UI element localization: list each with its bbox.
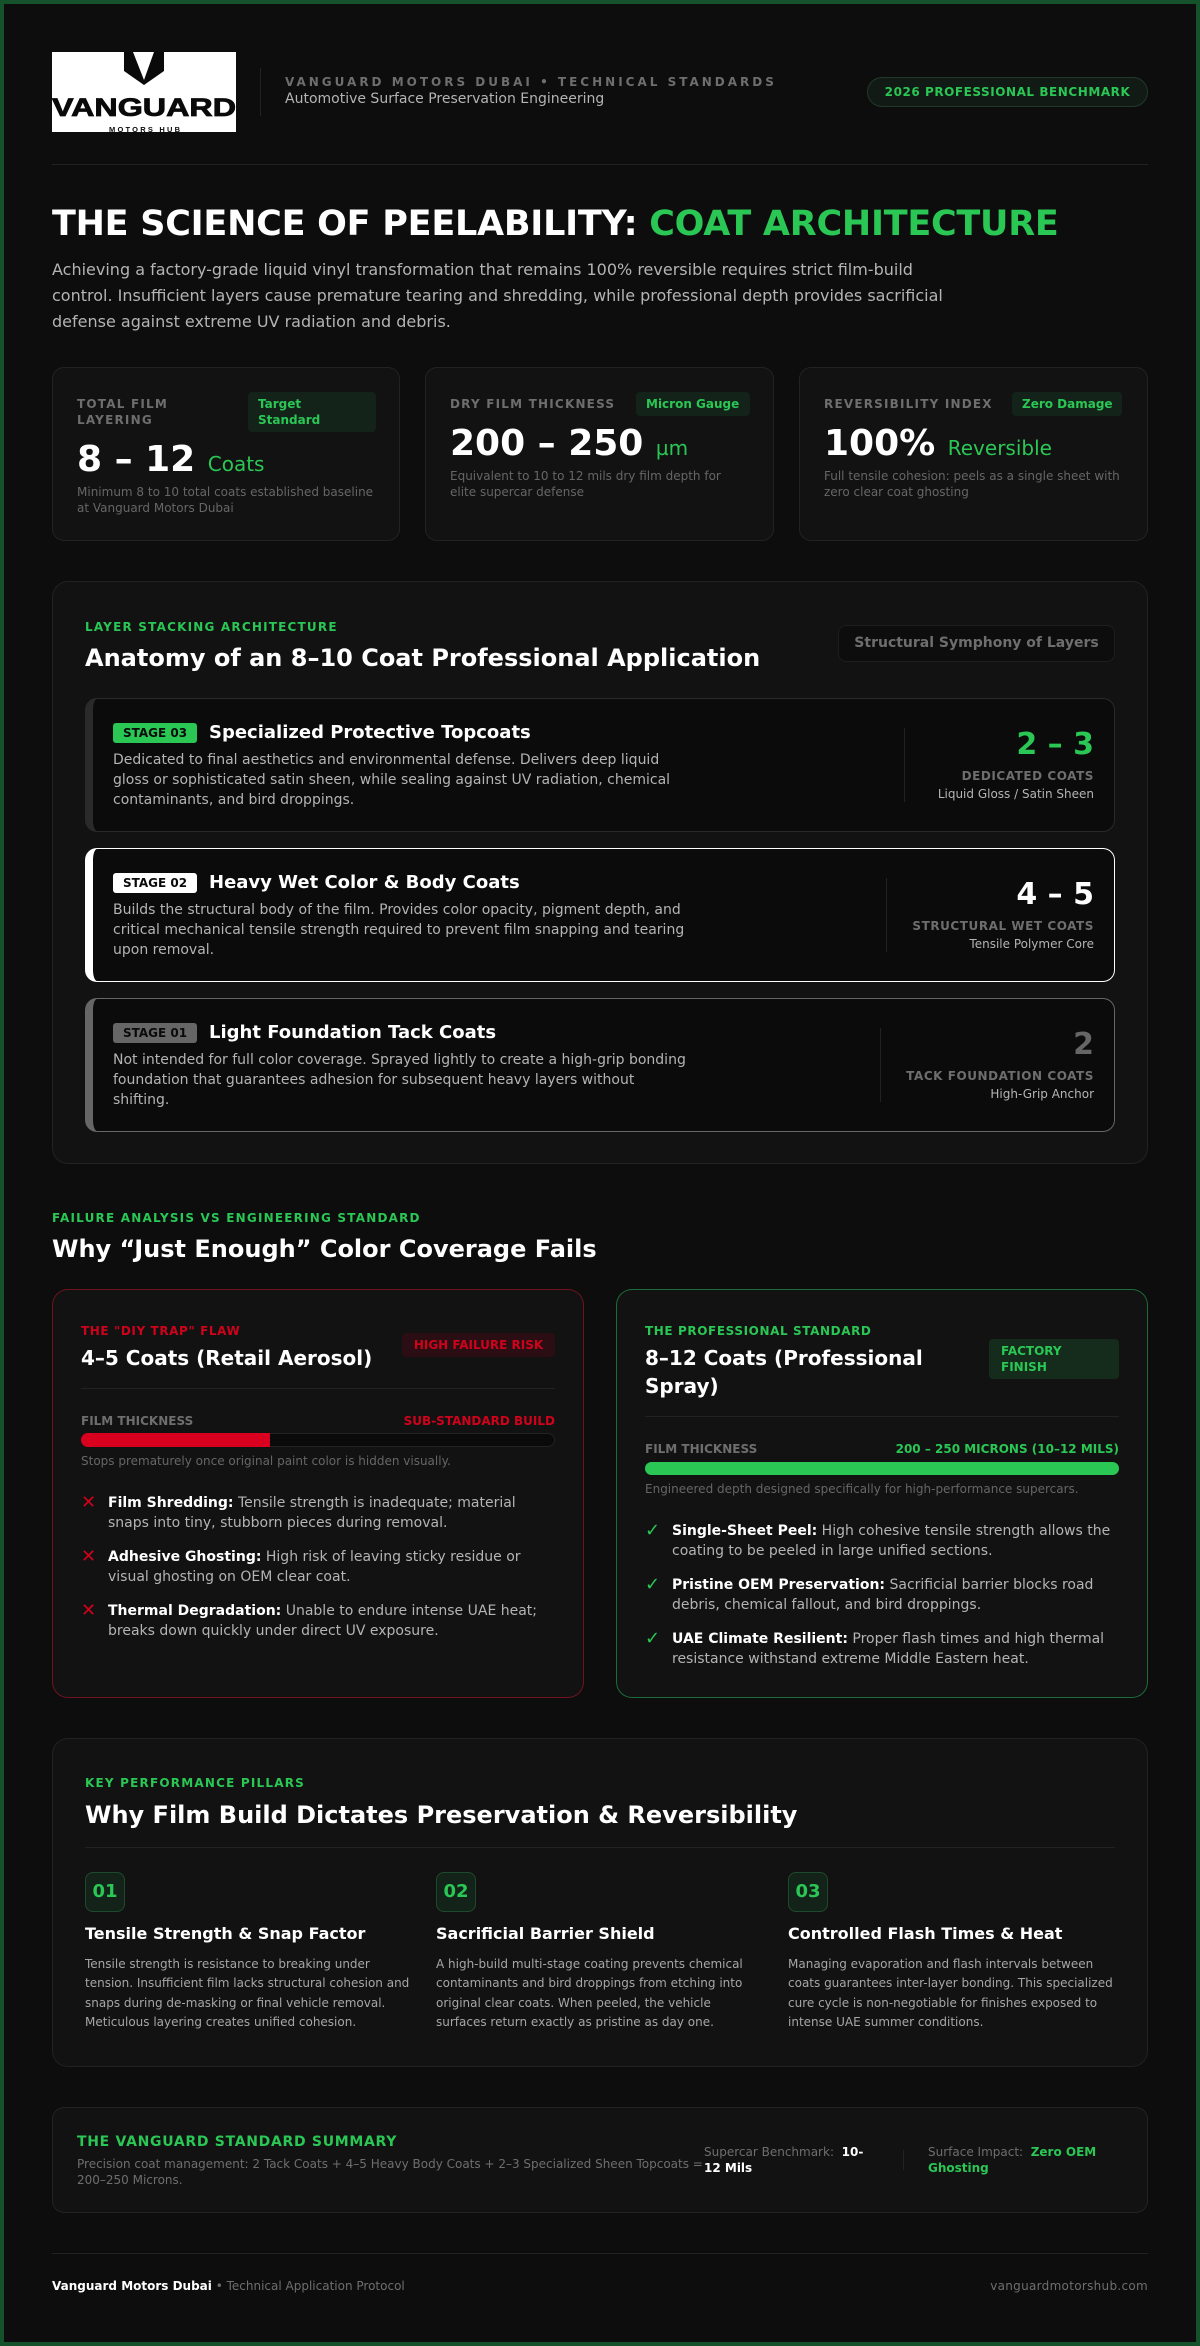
failure item xyxy=(81,1600,537,1639)
intro paragraph: Achieving a factory-grade liquid vinyl transformation that remains 100% reversible requires strict film-build xyxy=(52,260,913,279)
thickness bar xyxy=(81,1433,555,1447)
benefit item: coating to be peeled in large unified sections. xyxy=(672,1543,993,1559)
stage 01 card: TACK FOUNDATION COATS xyxy=(906,1069,1094,1083)
finish badge: FACTORY xyxy=(1001,1344,1062,1358)
panel: key performance pillars xyxy=(52,1738,1148,2067)
stage 03 card: gloss or sophisticated satin sheen, while sealing against UV radiation, chemical xyxy=(113,772,670,788)
stat card: reversibility index: 100% Reversible xyxy=(824,423,1052,464)
finish badge: FINISH xyxy=(1001,1360,1047,1374)
intro paragraph: control. Insufficient layers cause premature tearing and shredding, while professional depth provides sacrificial xyxy=(52,286,943,305)
panel: DIY trap: Stops prematurely once original paint color is hidden visually. xyxy=(81,1454,451,1468)
stage 02 card xyxy=(85,848,1115,982)
pillar 03: Managing evaporation and flash intervals between xyxy=(788,1957,1093,1971)
stage 02 card: STAGE 02 xyxy=(123,876,187,890)
benefit item xyxy=(645,1520,1110,1559)
benefit item: Pristine OEM Preservation: Sacrificial barrier blocks road xyxy=(672,1577,1093,1593)
panel: professional standard: 8–12 Coats (Professional xyxy=(645,1346,923,1370)
footer xyxy=(52,2279,1148,2293)
stat card: reversibility index: zero clear coat ghosting xyxy=(824,485,969,499)
failure item: Thermal Degradation: Unable to endure intense UAE heat; xyxy=(108,1603,537,1619)
stage 02 card: upon removal. xyxy=(113,942,214,958)
failure item: ✕ xyxy=(81,1600,96,1621)
pillar 01: 01 xyxy=(92,1881,118,1902)
panel: summary xyxy=(52,2107,1148,2213)
stage 02 card: 4 – 5 xyxy=(1016,877,1094,912)
panel: professional standard: Engineered depth designed specifically for high-performance supercars. xyxy=(645,1482,1079,1496)
stage 02 card: Tensile Polymer Core xyxy=(969,937,1094,951)
stat card: dry film thickness: 200 – 250 µm xyxy=(450,423,688,464)
pillar 02: original clear coats. When peeled, the vehicle xyxy=(436,1996,711,2010)
pillar 03 xyxy=(788,1872,1113,2029)
stat card: dry film thickness: Micron Gauge xyxy=(646,397,739,411)
header kicker: VANGUARD MOTORS DUBAI • TECHNICAL STANDARDS xyxy=(285,75,777,89)
benchmark badge xyxy=(867,77,1148,107)
summary text: 200–250 Microns. xyxy=(77,2173,183,2187)
heading: Anatomy of an 8–10 Coat Professional Application xyxy=(85,644,760,672)
header divider xyxy=(260,68,261,116)
title: THE SCIENCE OF PEELABILITY: COAT ARCHITECTURE xyxy=(52,204,1059,244)
logo: Vanguard Motors Hub: VANGUARD xyxy=(52,94,236,122)
stage 01 card: Not intended for full color coverage. Sprayed lightly to create a high-grip bonding xyxy=(113,1052,686,1068)
panel: professional standard: Spray) xyxy=(645,1374,719,1398)
summary heading: THE VANGUARD STANDARD SUMMARY xyxy=(77,2134,397,2150)
header xyxy=(52,52,1148,132)
stage 03 card: contaminants, and bird droppings. xyxy=(113,792,354,808)
stage 02 card: Heavy Wet Color & Body Coats xyxy=(209,872,520,893)
stage 03 card: 2 – 3 xyxy=(1016,727,1094,762)
benefit item: resistance withstand extreme Middle Eastern heat. xyxy=(672,1651,1029,1667)
stage 01 card: High-Grip Anchor xyxy=(990,1087,1094,1101)
stage 03 card xyxy=(85,698,1115,832)
stat card: total film layering: Target xyxy=(258,397,301,411)
failure item: breaks down quickly under direct UV exposure. xyxy=(108,1623,439,1639)
stage 01 card: Light Foundation Tack Coats xyxy=(209,1022,496,1043)
panel: key performance pillars: KEY PERFORMANCE PILLARS xyxy=(85,1776,305,1790)
pillar 01: Meticulous layering creates unified cohesion. xyxy=(85,2015,356,2029)
pillar 01: tension. Insufficient film lacks structural cohesion and xyxy=(85,1976,409,1990)
risk badge: HIGH FAILURE RISK xyxy=(414,1338,543,1352)
pillar 03: 03 xyxy=(795,1881,821,1902)
stat card: reversibility index xyxy=(799,367,1148,541)
panel: DIY trap: FILM THICKNESS xyxy=(81,1414,193,1428)
logo: Vanguard Motors Hub xyxy=(52,52,236,132)
pillar 01 xyxy=(84,1872,409,2029)
summary text xyxy=(77,2157,703,2187)
stat card: total film layering: Standard xyxy=(258,413,320,427)
failure item: ✕ xyxy=(81,1546,96,1567)
stage 03 card: Dedicated to final aesthetics and environmental defense. Delivers deep liquid xyxy=(113,752,659,768)
footer: Vanguard Motors Dubai • Technical Application Protocol xyxy=(52,2279,405,2293)
benefit item: ✓ xyxy=(645,1628,660,1649)
intro paragraph: defense against extreme UV radiation and debris. xyxy=(52,312,451,331)
benefit item xyxy=(645,1574,1093,1613)
panel: DIY trap: 4–5 Coats (Retail Aerosol) xyxy=(81,1346,372,1370)
stage 02 card: STRUCTURAL WET COATS xyxy=(912,919,1094,933)
failure item xyxy=(81,1546,521,1585)
panel: layer stacking architecture xyxy=(52,581,1148,1164)
intro paragraph xyxy=(52,260,943,331)
stat card: total film layering: LAYERING xyxy=(77,413,153,427)
panel: key performance pillars: Why Film Build Dictates Preservation & Reversibility xyxy=(85,1801,797,1829)
pillar 02: A high-build multi-stage coating prevents chemical xyxy=(436,1957,743,1971)
pillar 02 xyxy=(436,1872,743,2029)
surface impact: Surface Impact: Zero OEM xyxy=(928,2145,1096,2159)
pillar 02: Sacrificial Barrier Shield xyxy=(436,1924,655,1943)
stage 01 card: STAGE 01 xyxy=(123,1026,187,1040)
footer: vanguardmotorshub.com xyxy=(990,2279,1148,2293)
risk badge xyxy=(402,1333,555,1357)
panel: professional standard: 200 – 250 MICRONS (10–12 MILS) xyxy=(896,1442,1119,1456)
supercar benchmark xyxy=(704,2145,863,2175)
failure item: snaps into tiny, stubborn pieces during removal. xyxy=(108,1515,447,1531)
failure item: Film Shredding: Tensile strength is inadequate; material xyxy=(108,1495,516,1511)
panel: professional standard: FILM THICKNESS xyxy=(645,1442,757,1456)
tag xyxy=(838,625,1115,662)
stat card: dry film thickness: elite supercar defense xyxy=(450,485,584,499)
pillar 01: Tensile Strength & Snap Factor xyxy=(85,1924,365,1943)
panel: professional standard xyxy=(616,1289,1148,1698)
failure item: ✕ xyxy=(81,1492,96,1513)
benefit item: ✓ xyxy=(645,1520,660,1541)
pillar 02: contaminants and bird droppings from etching into xyxy=(436,1976,742,1990)
pillar 02: 02 xyxy=(443,1881,469,1902)
surface impact: Ghosting xyxy=(928,2161,989,2175)
supercar benchmark: Supercar Benchmark: 10- xyxy=(704,2145,863,2159)
supercar benchmark: 12 Mils xyxy=(704,2161,752,2175)
pillar 02: surfaces return exactly as pristine as day one. xyxy=(436,2015,714,2029)
stage 01 card: 2 xyxy=(1073,1027,1094,1062)
benefit item: Single-Sheet Peel: High cohesive tensile strength allows the xyxy=(672,1523,1110,1539)
stage 01 card: foundation that guarantees adhesion for subsequent heavy layers without xyxy=(113,1072,634,1088)
summary text: Precision coat management: 2 Tack Coats + 4–5 Heavy Body Coats + 2–3 Specialized Sheen Topcoats = xyxy=(77,2157,703,2171)
stage 02 card: critical mechanical tensile strength required to prevent film snapping and tearing xyxy=(113,922,684,938)
benefit item xyxy=(645,1628,1104,1667)
pillar 01: Tensile strength is resistance to breaking under xyxy=(85,1957,370,1971)
thickness bar xyxy=(645,1462,1119,1475)
stat card: total film layering xyxy=(52,367,400,541)
header subtitle: Automotive Surface Preservation Engineering xyxy=(285,91,604,107)
stage 03 card: STAGE 03 xyxy=(123,726,187,740)
benchmark badge: 2026 PROFESSIONAL BENCHMARK xyxy=(885,85,1130,99)
benefit item: ✓ xyxy=(645,1574,660,1595)
section heading: failure analysis: FAILURE ANALYSIS VS ENGINEERING STANDARD xyxy=(52,1211,421,1225)
panel: DIY trap: SUB-STANDARD BUILD xyxy=(404,1414,555,1428)
pillar 03: coats guarantees inter-layer bonding. This specialized xyxy=(788,1976,1113,1990)
stat card: total film layering: Minimum 8 to 10 total coats established baseline xyxy=(77,485,373,499)
failure item xyxy=(81,1492,516,1531)
panel: professional standard: THE PROFESSIONAL STANDARD xyxy=(645,1324,871,1338)
section heading: failure analysis: Why “Just Enough” Color Coverage Fails xyxy=(52,1235,597,1263)
stage 01 card: shifting. xyxy=(113,1092,169,1108)
stat card: dry film thickness: Equivalent to 10 to 12 mils dry film depth for xyxy=(450,469,721,483)
stage 03 card: Liquid Gloss / Satin Sheen xyxy=(938,787,1094,801)
failure item: visual ghosting on OEM clear coat. xyxy=(108,1569,351,1585)
stage 03 card: DEDICATED COATS xyxy=(962,769,1094,783)
finish badge xyxy=(989,1339,1119,1379)
stat card: total film layering: at Vanguard Motors Dubai xyxy=(77,501,234,515)
benefit item: UAE Climate Resilient: Proper flash times and high thermal xyxy=(672,1631,1104,1647)
benefit item: debris, chemical fallout, and bird droppings. xyxy=(672,1597,981,1613)
surface impact xyxy=(928,2145,1096,2175)
stage 01 card xyxy=(85,998,1115,1132)
stat card: reversibility index: Full tensile cohesion: peels as a single sheet with xyxy=(824,469,1120,483)
pillar 03: intense UAE summer conditions. xyxy=(788,2015,983,2029)
stage 02 card: Builds the structural body of the film. Provides color opacity, pigment depth, and xyxy=(113,902,681,918)
failure item: Adhesive Ghosting: High risk of leaving sticky residue or xyxy=(108,1549,521,1565)
stat card: dry film thickness: DRY FILM THICKNESS xyxy=(450,397,615,411)
pillar 03: Controlled Flash Times & Heat xyxy=(788,1924,1062,1943)
stat card: total film layering: TOTAL FILM xyxy=(77,397,168,411)
stat card: reversibility index: Zero Damage xyxy=(1022,397,1113,411)
stat card: total film layering: 8 – 12 Coats xyxy=(77,439,264,480)
section heading: failure analysis xyxy=(52,1211,597,1263)
stage 03 card: Specialized Protective Topcoats xyxy=(209,722,531,743)
pillar 01: snaps during de-masking or final vehicle removal. xyxy=(85,1996,385,2010)
tag: Structural Symphony of Layers xyxy=(854,635,1099,651)
eyebrow: LAYER STACKING ARCHITECTURE xyxy=(85,620,338,634)
pillar 03: cure cycle is non-negotiable for finishes exposed to xyxy=(788,1996,1097,2010)
panel: DIY trap: THE "DIY TRAP" FLAW xyxy=(81,1324,240,1338)
stat card: reversibility index: REVERSIBILITY INDEX xyxy=(824,397,993,411)
panel: DIY trap xyxy=(52,1289,584,1698)
stat card: dry film thickness xyxy=(425,367,774,541)
